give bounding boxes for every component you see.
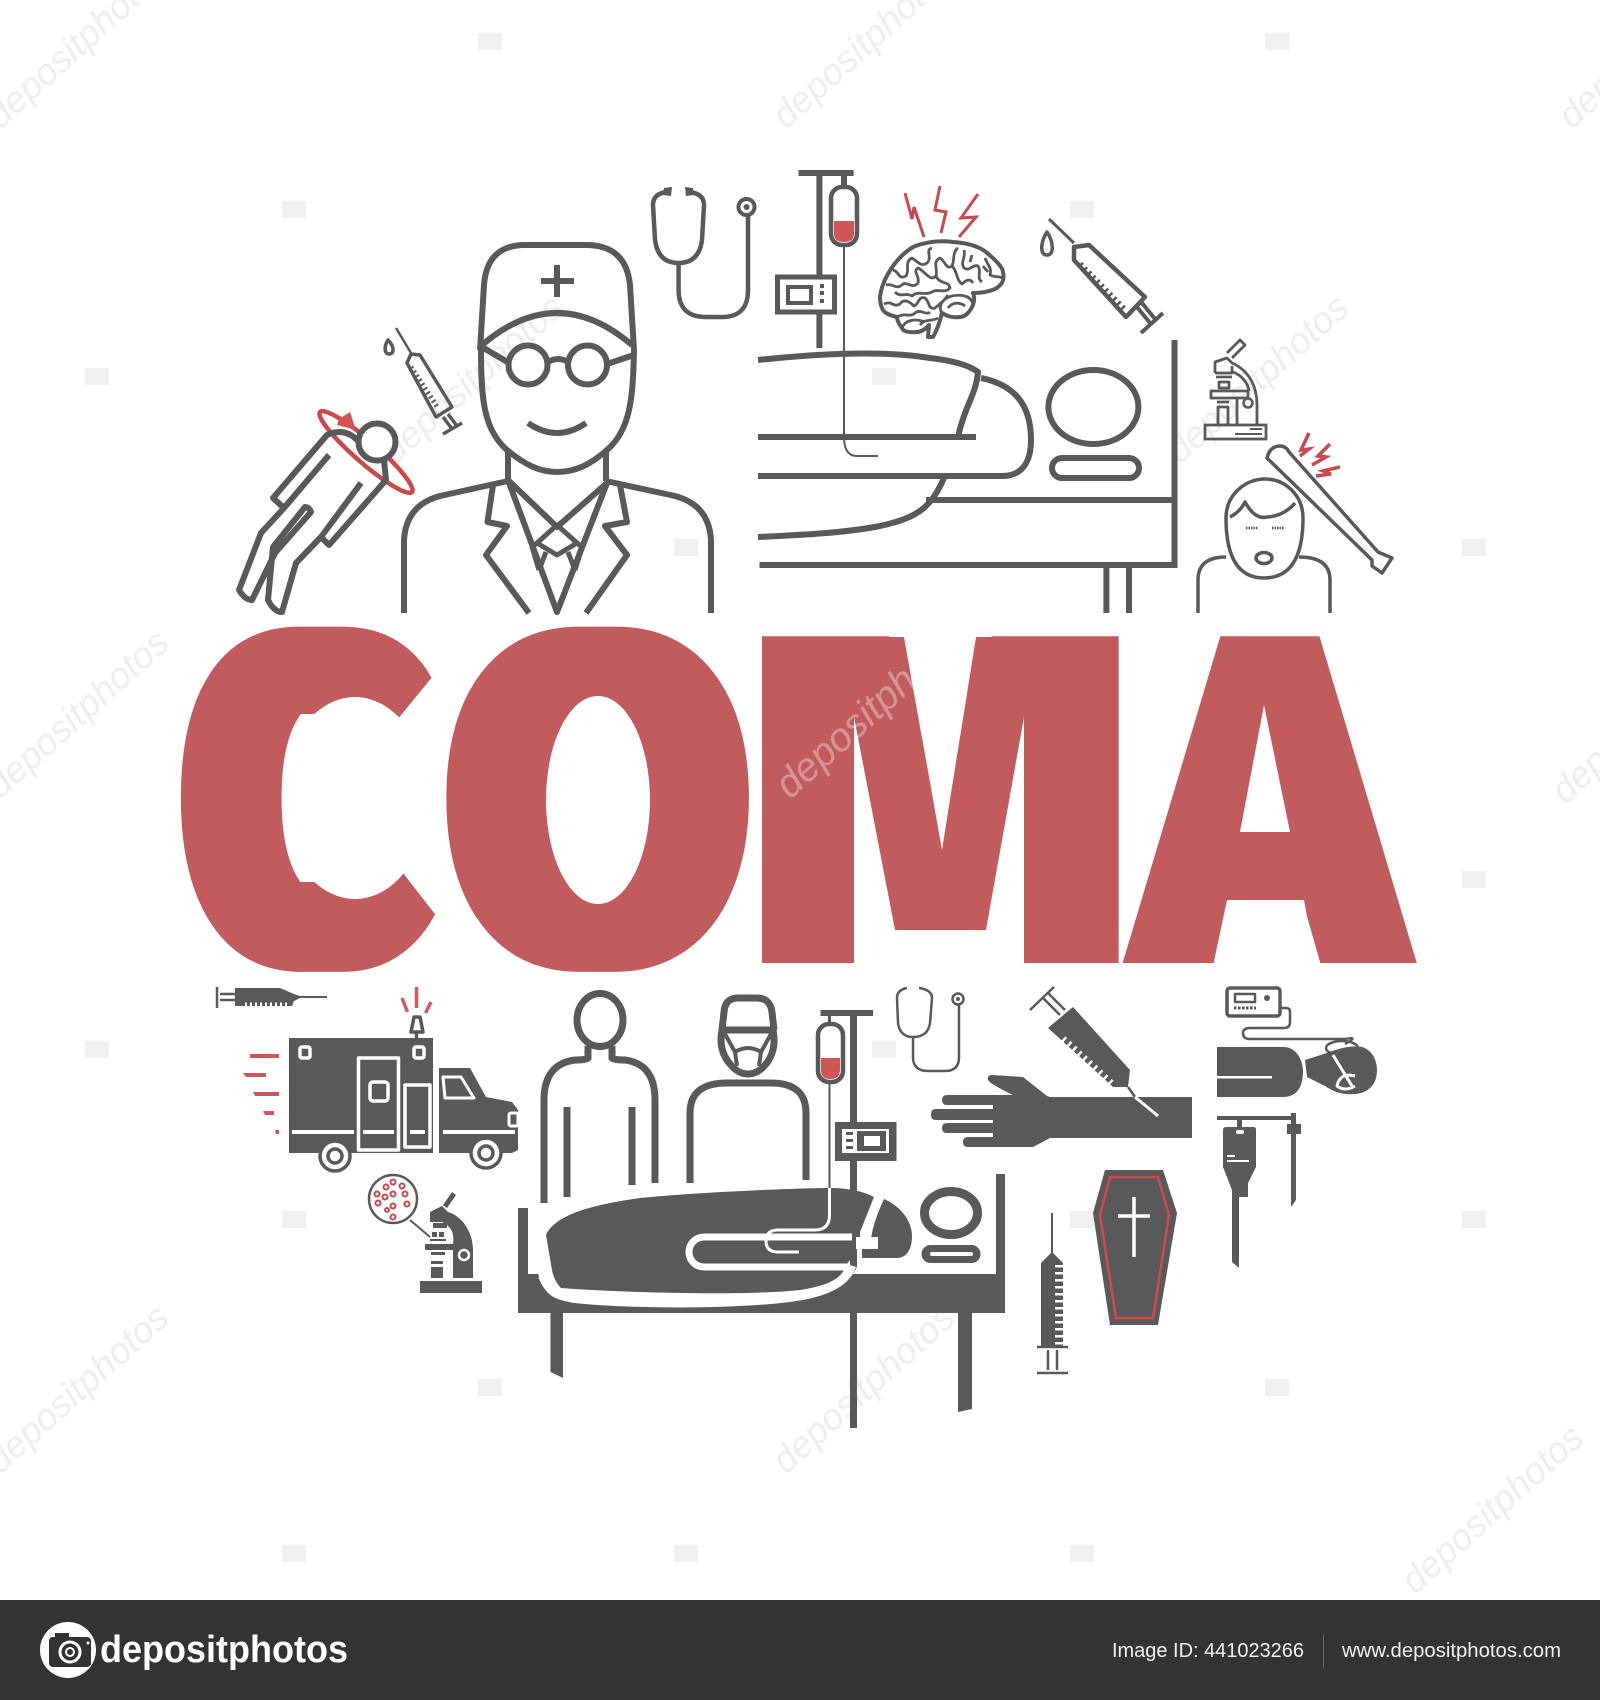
icon: stethoscope top xyxy=(653,187,754,317)
icon: patient in bed outline xyxy=(758,340,1177,613)
title: COMA: O xyxy=(455,539,741,1060)
icon: bed with sedated patient xyxy=(518,1013,1005,1428)
watermark pattern: depositphotos xyxy=(1158,286,1357,471)
icon: surgeon xyxy=(690,998,806,1183)
icon: vertical syringe xyxy=(1037,1213,1068,1373)
icon: spinning patient xyxy=(239,404,419,612)
watermark over title: depositphotos xyxy=(767,607,981,807)
icon: monitored patient xyxy=(1217,988,1377,1097)
title: COMA xyxy=(193,537,1400,1060)
footer logo: depositphotos xyxy=(100,1629,348,1671)
icon: IV drip top xyxy=(778,173,878,456)
icon: ambulance xyxy=(243,987,518,1171)
footer image id: Image ID: 441023266 xyxy=(1112,1640,1304,1662)
icon: coffin xyxy=(1093,1170,1177,1325)
watermark pattern: depositphotos xyxy=(1393,1416,1592,1601)
icon: arm with injection xyxy=(931,987,1192,1147)
icon: standing person xyxy=(544,994,655,1203)
footer logo xyxy=(40,1622,348,1678)
icon: stethoscope bottom xyxy=(897,988,964,1071)
watermark pattern: depositphotos xyxy=(764,1296,963,1481)
icon: drainage bag on stand xyxy=(1217,1113,1301,1268)
watermark pattern: depositphotos xyxy=(373,286,572,471)
icon: microscope outline xyxy=(1205,340,1266,439)
footer website: www.depositphotos.com xyxy=(1341,1640,1561,1662)
icon: small syringe xyxy=(385,328,462,434)
title: COMA: C xyxy=(193,537,434,1059)
icon: brain xyxy=(880,241,1004,337)
icon: man hit by bat xyxy=(1198,433,1392,613)
icon: horizontal syringe xyxy=(217,987,327,1008)
icon: microscope with sample xyxy=(369,1175,482,1293)
band: footer xyxy=(0,1600,1600,1700)
title: COMA: M xyxy=(754,553,1126,1044)
icon: IV drip bottom xyxy=(818,1010,896,1188)
icon: brain lightning bolts xyxy=(905,186,978,237)
icon: large syringe xyxy=(1042,219,1163,333)
icon: doctor xyxy=(404,245,711,613)
title: COMA: A xyxy=(1140,554,1400,1045)
